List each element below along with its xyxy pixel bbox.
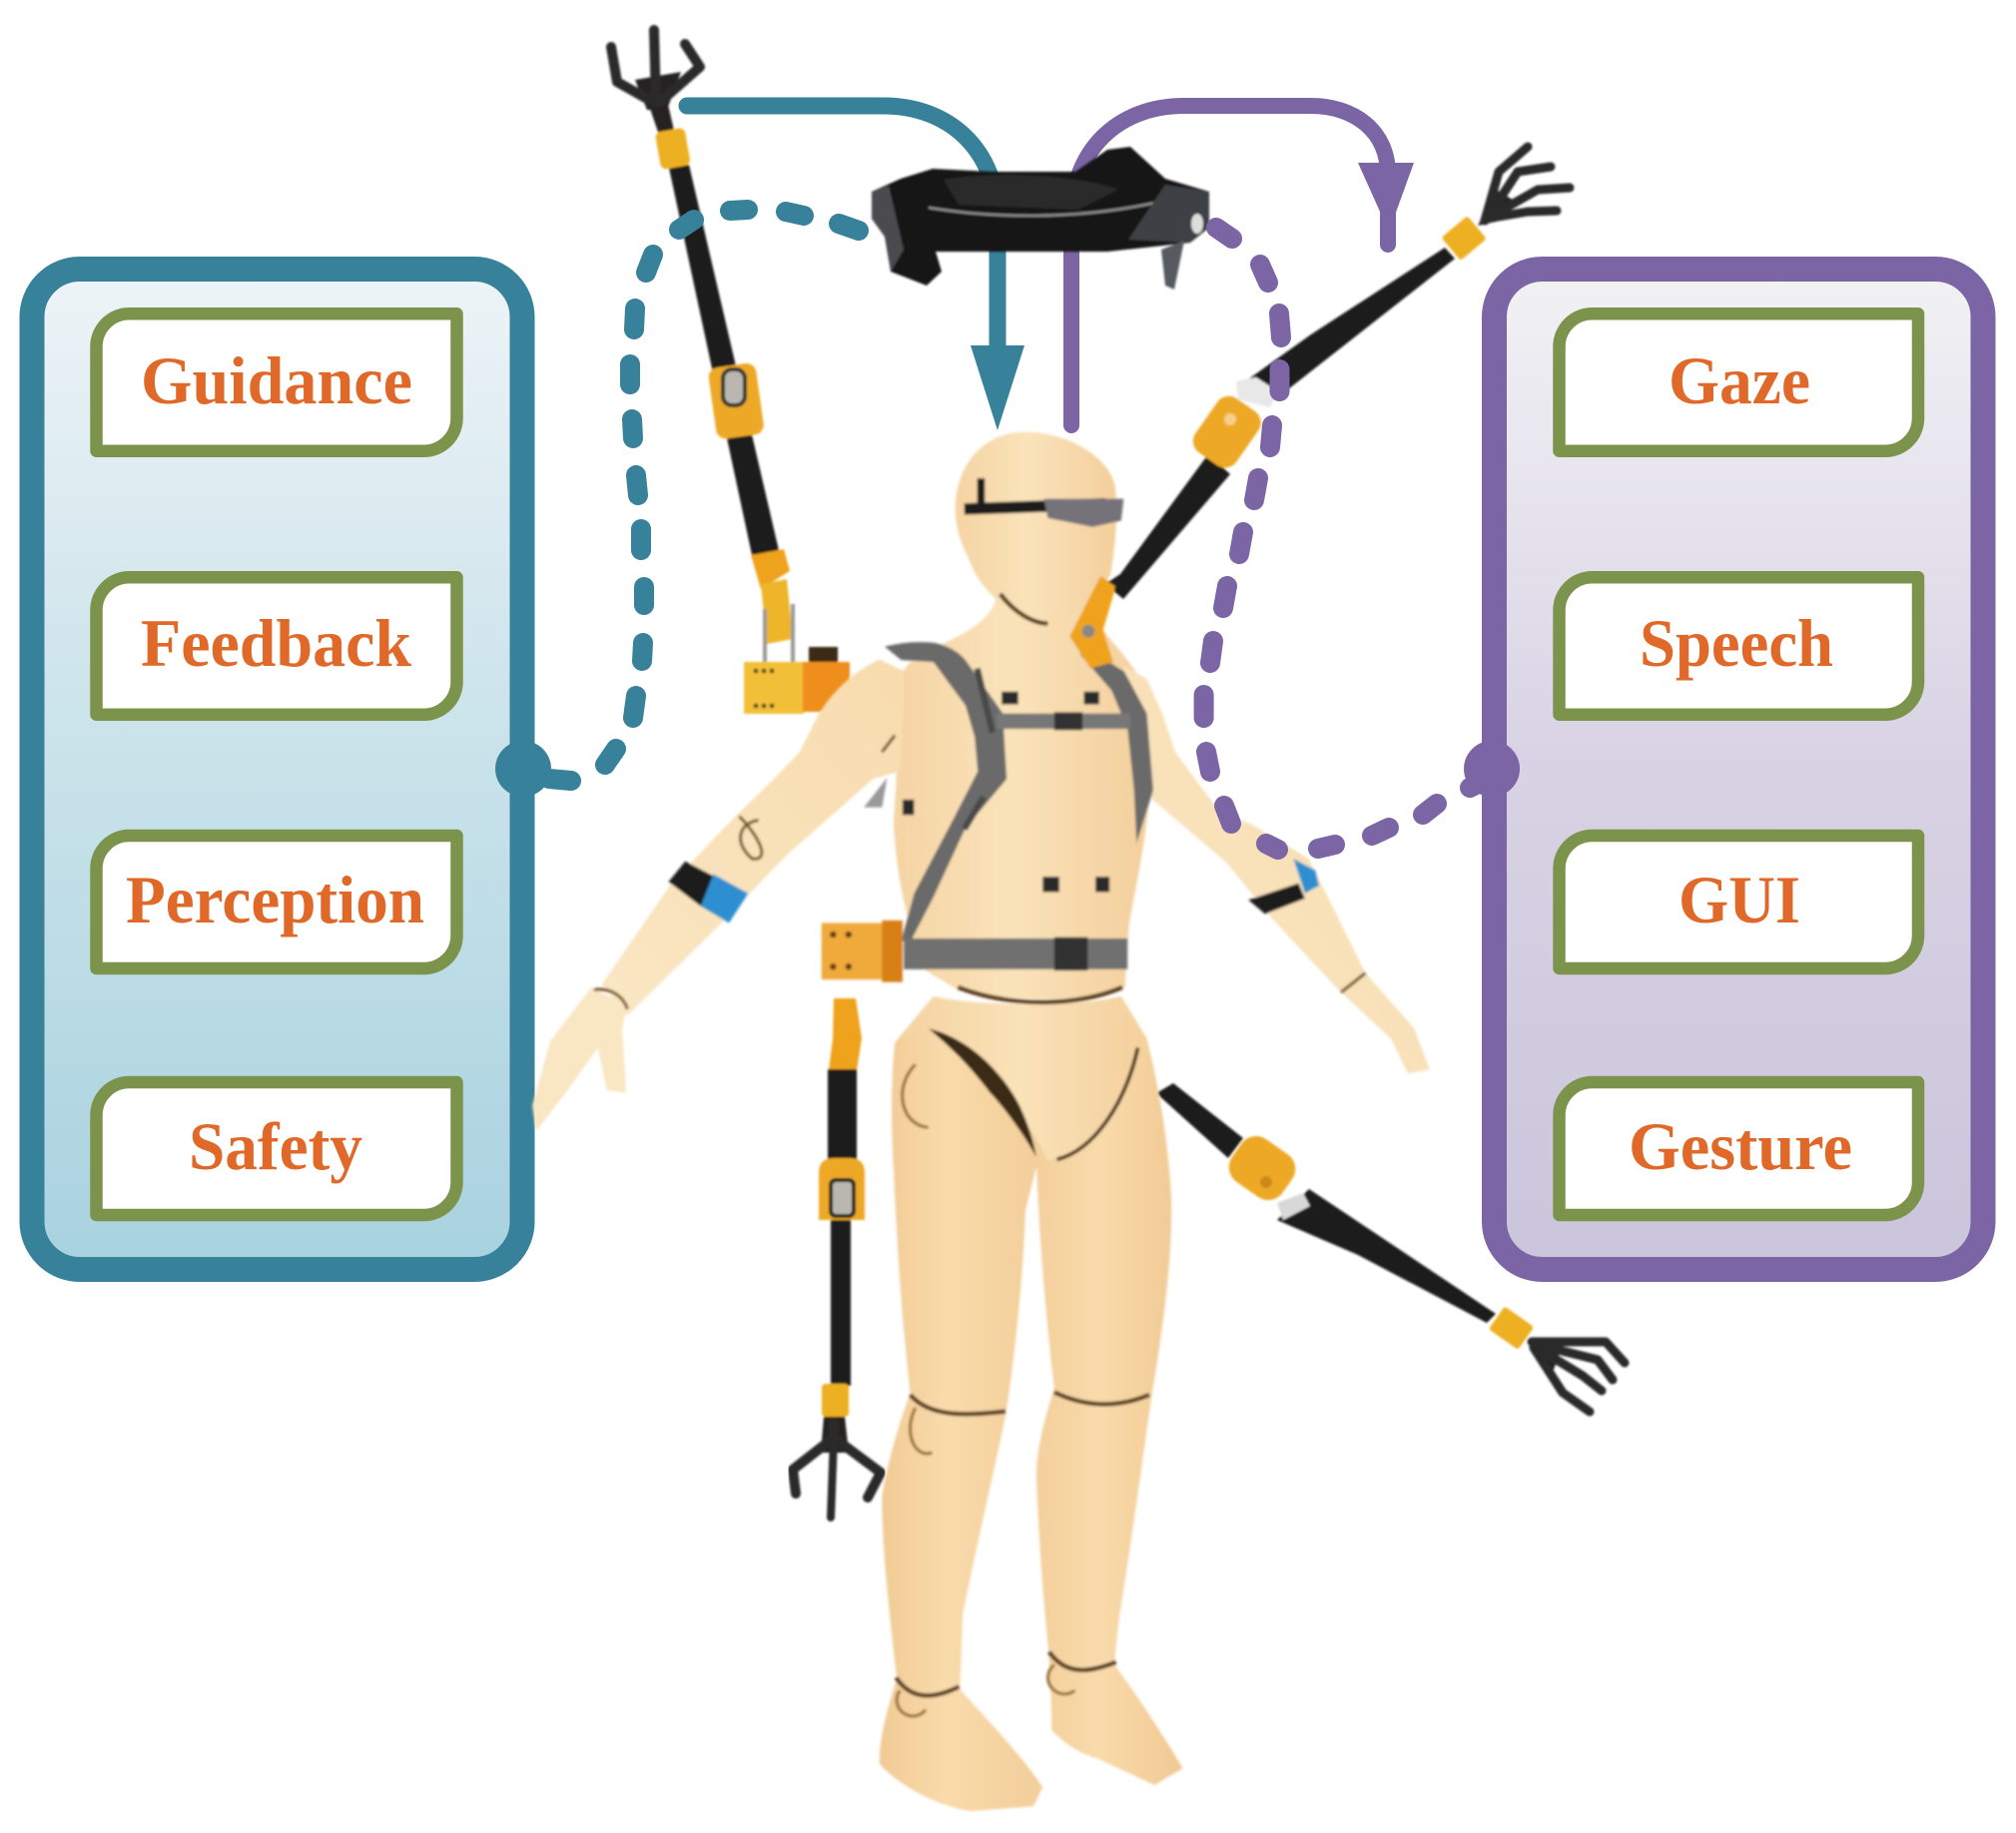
box: Safety: Safety	[189, 1108, 362, 1184]
box: Guidance: Guidance	[141, 342, 412, 418]
sensor markers	[903, 692, 1109, 893]
box: Guidance	[96, 313, 457, 451]
torso	[894, 591, 1150, 999]
box: Feedback	[96, 577, 457, 715]
belt box	[822, 920, 903, 982]
left leg	[880, 996, 1042, 1811]
belt	[904, 937, 1127, 970]
shoulder connector	[1069, 576, 1116, 669]
viewer-left arm	[602, 660, 904, 1015]
harness straps	[885, 642, 1153, 941]
viewer-left hand	[532, 987, 627, 1131]
back bracket	[864, 778, 887, 808]
groin crease left	[929, 1028, 1036, 1157]
connector node: teal	[495, 741, 551, 797]
elbow and wrist lines	[594, 736, 1365, 1009]
box: Speech	[1560, 577, 1918, 715]
robot arm: upper right	[1105, 147, 1570, 599]
box: Gaze	[1560, 313, 1918, 451]
groin crease right	[1056, 1047, 1138, 1159]
hip and knee circles	[897, 1064, 1074, 1716]
box: Feedback: Feedback	[141, 605, 411, 681]
connection arrow: purple	[1071, 106, 1414, 425]
headset	[872, 147, 1209, 290]
right panel frame	[1494, 270, 1983, 1270]
robot arm: lower left	[793, 998, 881, 1518]
box: Perception	[96, 836, 457, 968]
box: Safety	[96, 1082, 457, 1215]
left panel frame	[32, 270, 522, 1270]
box: GUI: GUI	[1679, 862, 1800, 937]
box: Gesture	[1560, 1082, 1918, 1215]
jaw and joint lines	[896, 594, 1149, 1695]
robot arm: upper left	[611, 30, 850, 714]
armband: right	[1248, 859, 1319, 914]
box: GUI	[1560, 836, 1918, 968]
connection arrow: teal	[687, 106, 1024, 430]
mannequin body	[532, 432, 1430, 1811]
viewer-right arm and hand	[1123, 666, 1430, 1073]
right leg	[1028, 996, 1183, 1785]
armband: left	[669, 862, 748, 922]
connector node: purple	[1464, 741, 1520, 797]
box: Gesture: Gesture	[1629, 1108, 1852, 1184]
pelvis	[900, 996, 1147, 1161]
glasses	[965, 478, 1123, 527]
dashed link: purple	[1204, 228, 1488, 850]
head	[956, 432, 1116, 622]
robot arm: lower right	[1156, 1083, 1625, 1412]
box: Perception: Perception	[126, 862, 424, 937]
box: Speech: Speech	[1640, 605, 1833, 681]
box: Gaze: Gaze	[1669, 342, 1810, 418]
panel: left output modalities	[32, 270, 522, 1270]
dashed link: teal	[549, 210, 859, 781]
panel: right input modalities	[1494, 270, 1983, 1270]
